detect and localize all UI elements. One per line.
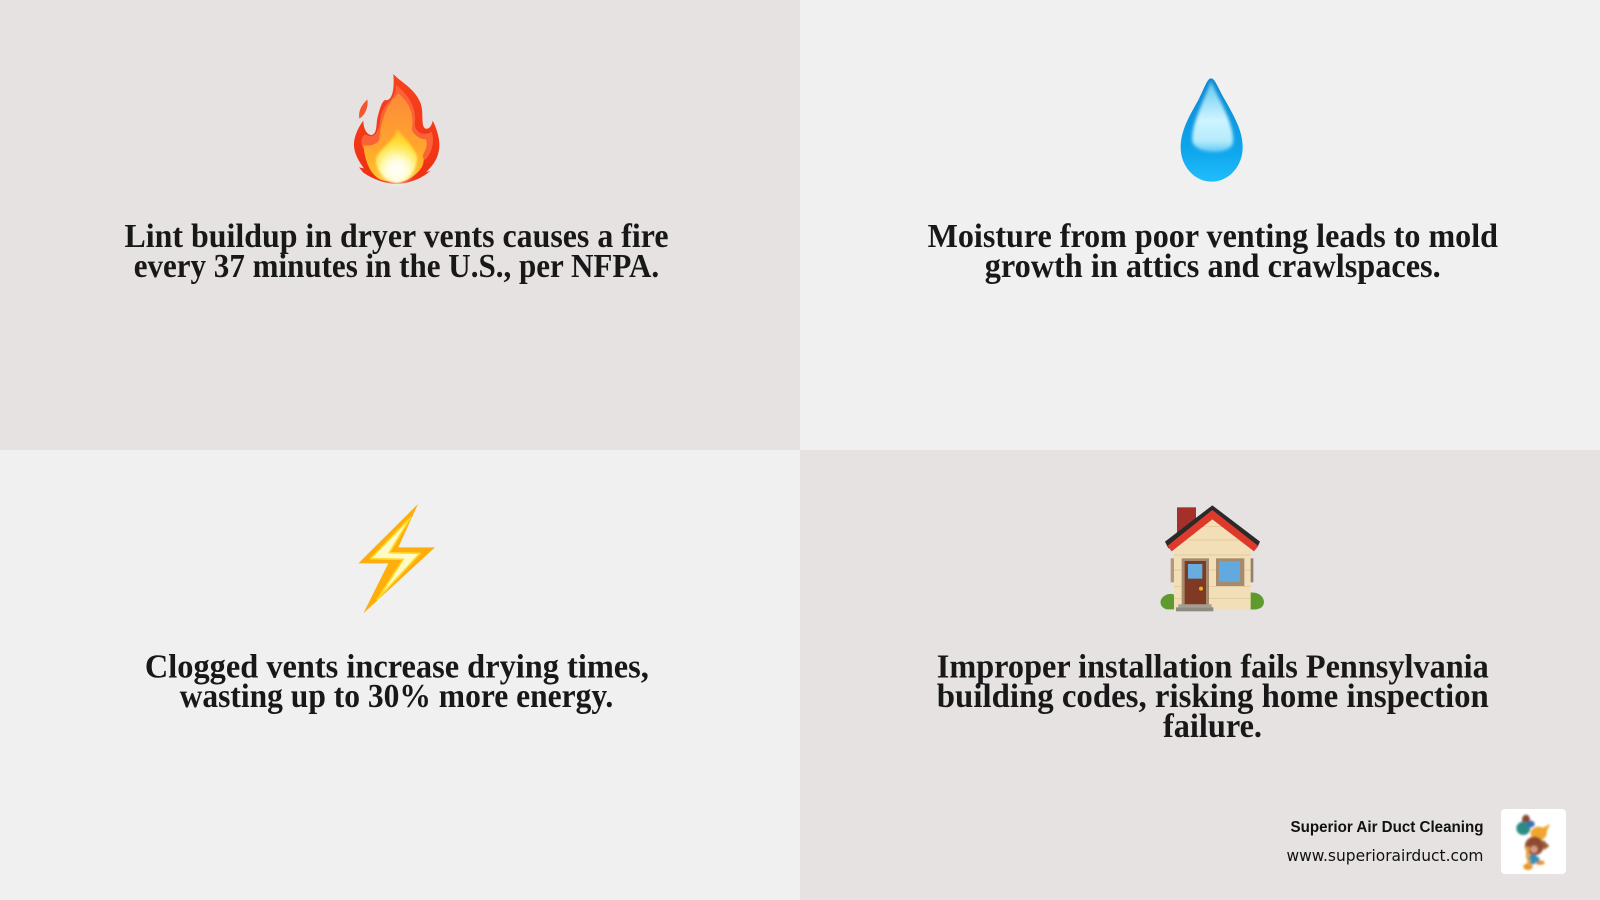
heading: moisture: growth in attics and crawlspaces.	[985, 248, 1441, 285]
website: www.superiorairduct.com	[1286, 846, 1484, 865]
panel: energy	[0, 450, 800, 900]
heading: fire risk: Lint buildup in dryer vents causes a fire	[124, 218, 668, 255]
heading: building codes: Improper installation fails Pennsylvania	[937, 648, 1489, 686]
panel: building codes	[800, 450, 1600, 900]
heading: moisture: Moisture from poor venting leads to mold	[928, 218, 1498, 255]
icon: lightning bolt	[358, 504, 435, 613]
heading: building codes: building codes, risking home inspection	[937, 678, 1489, 715]
panel: fire risk	[0, 0, 800, 450]
icon: house	[1160, 505, 1264, 611]
brand name: Superior Air Duct Cleaning	[1290, 819, 1484, 836]
logo	[1501, 809, 1566, 874]
icon: fire	[354, 74, 439, 184]
heading: energy: Clogged vents increase drying times,	[145, 648, 649, 686]
icon: water drop	[1181, 78, 1243, 182]
panel: moisture	[800, 0, 1600, 450]
heading: energy: wasting up to 30% more energy.	[180, 678, 613, 715]
heading: building codes: failure.	[1163, 708, 1262, 745]
heading: fire risk: every 37 minutes in the U.S., per NFPA.	[134, 248, 659, 285]
